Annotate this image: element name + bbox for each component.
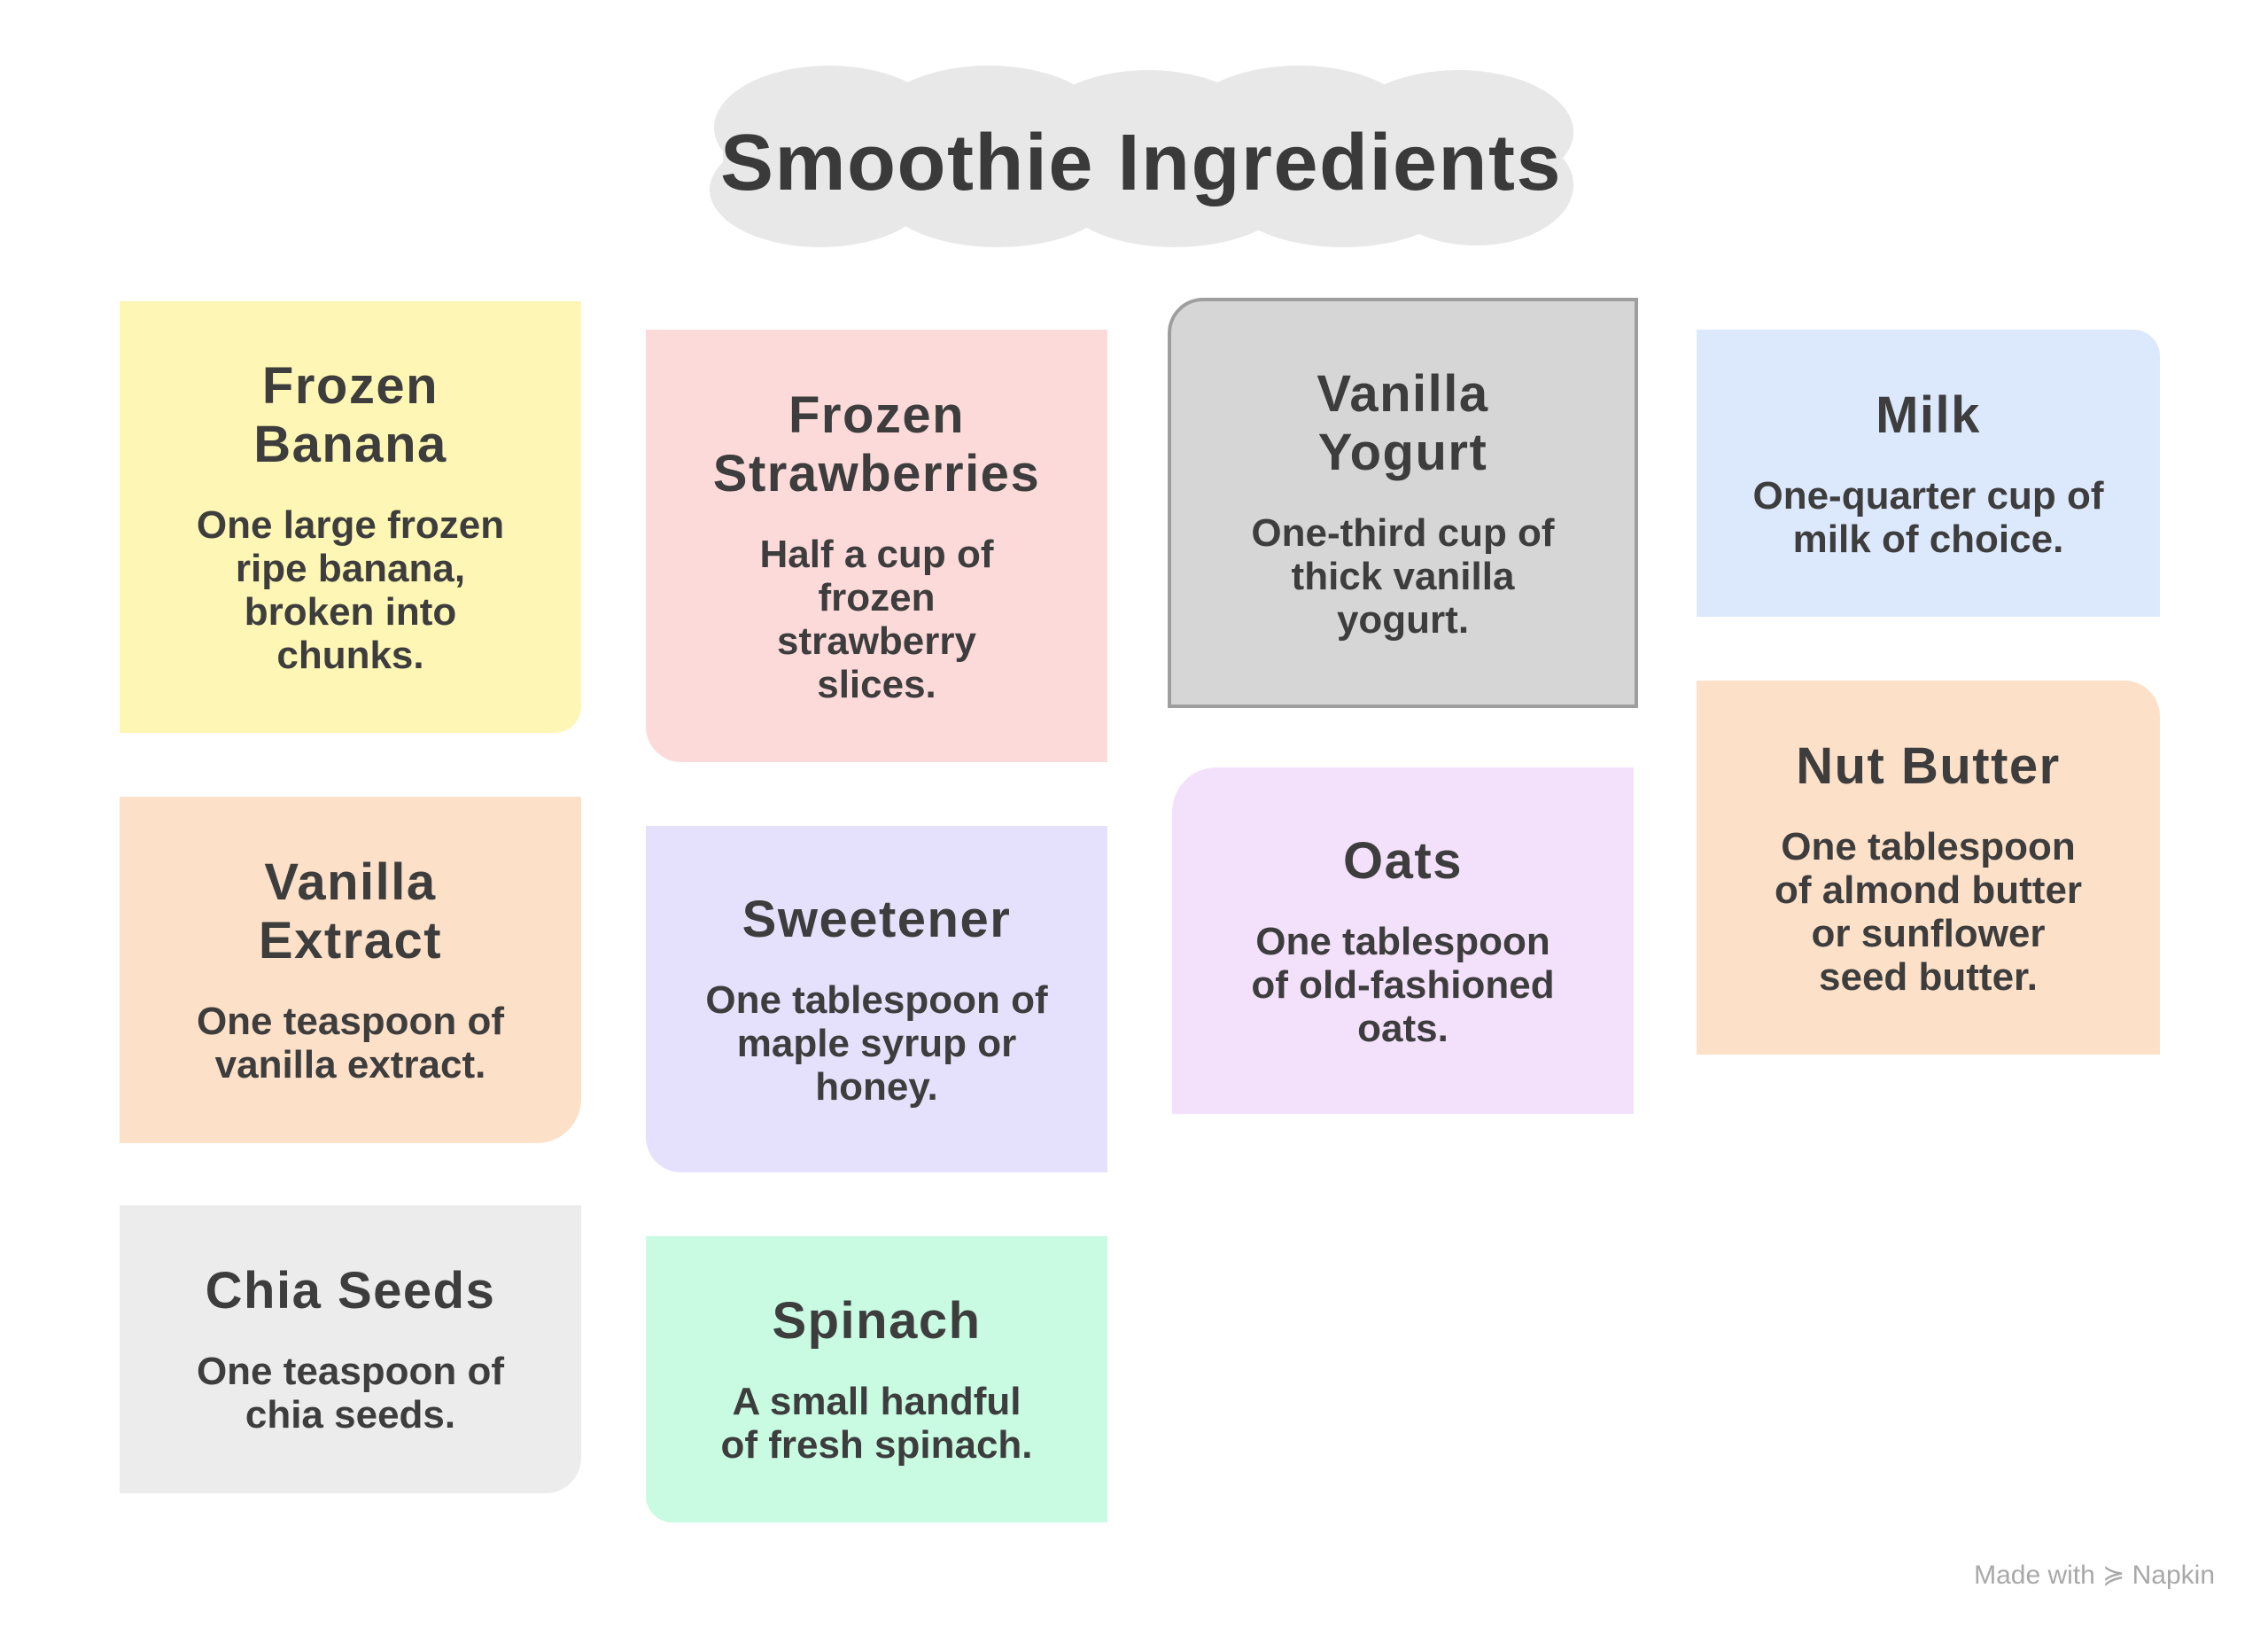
card: oats: of old-fashioned: [1251, 962, 1555, 1007]
card: vanilla yogurt: [1168, 298, 1638, 708]
card: spinach: of fresh spinach.: [720, 1423, 1033, 1467]
card: sweetener: maple syrup or: [737, 1021, 1016, 1065]
card: nut butter: of almond butter: [1775, 868, 2082, 911]
card: vanilla extract: Vanilla: [264, 853, 437, 911]
card: nut butter: seed butter.: [1819, 955, 2038, 998]
card: chia seeds: One teaspoon of: [197, 1350, 504, 1393]
card: vanilla yogurt: thick vanilla: [1292, 555, 1514, 597]
card: spinach: Spinach: [772, 1292, 982, 1350]
card: sweetener: Sweetener: [742, 890, 1011, 948]
card: vanilla extract: Extract: [259, 912, 442, 969]
title: Smoothie Ingredients: [720, 119, 1562, 207]
card: frozen banana: ripe banana,: [236, 547, 465, 590]
card: vanilla extract: [120, 797, 581, 1143]
card: sweetener: [646, 826, 1107, 1172]
card: vanilla yogurt: One-third cup of: [1251, 510, 1555, 555]
card: vanilla yogurt: Yogurt: [1318, 424, 1487, 480]
card: oats: [1172, 767, 1634, 1114]
card: nut butter: [1697, 681, 2160, 1055]
card: frozen strawberries: [646, 330, 1107, 762]
card: oats: oats.: [1357, 1007, 1449, 1049]
card: frozen strawberries: strawberry: [777, 619, 976, 663]
card: frozen strawberries: slices.: [817, 663, 936, 705]
card: nut butter: or sunflower: [1811, 911, 2046, 955]
title cloud: [710, 66, 1573, 247]
card: frozen strawberries: Half a cup of: [759, 532, 994, 576]
card: frozen banana: Banana: [253, 416, 447, 473]
card: frozen strawberries: Strawberries: [713, 445, 1040, 502]
card: frozen banana: One large frozen: [197, 503, 504, 547]
card: chia seeds: chia seeds.: [245, 1393, 455, 1436]
card: chia seeds: [120, 1205, 581, 1493]
card: nut butter: One tablespoon: [1781, 824, 2076, 868]
card: milk: milk of choice.: [1793, 518, 2063, 560]
card: sweetener: One tablespoon of: [705, 978, 1048, 1021]
card: milk: [1697, 330, 2160, 617]
card: frozen strawberries: frozen: [819, 576, 936, 619]
card: spinach: A small handful: [732, 1380, 1021, 1423]
card: frozen banana: broken into: [245, 590, 456, 634]
card: sweetener: honey.: [815, 1065, 938, 1108]
card: vanilla extract: One teaspoon of: [197, 1000, 504, 1043]
card: vanilla extract: vanilla extract.: [215, 1043, 485, 1086]
card: spinach: [646, 1236, 1107, 1522]
card: vanilla yogurt: yogurt.: [1337, 597, 1469, 642]
card: nut butter: Nut Butter: [1796, 737, 2061, 794]
card: frozen banana: [120, 301, 581, 733]
card: milk: One-quarter cup of: [1752, 473, 2104, 518]
card: frozen strawberries: Frozen: [788, 386, 965, 443]
watermark: Made with ≽ Napkin: [1974, 1561, 2215, 1590]
card: oats: Oats: [1343, 831, 1463, 890]
card: chia seeds: Chia Seeds: [206, 1262, 495, 1320]
card: frozen banana: Frozen: [262, 357, 439, 415]
card: frozen banana: chunks.: [276, 634, 424, 677]
card: oats: One tablespoon: [1255, 920, 1550, 962]
card: milk: Milk: [1876, 386, 1981, 443]
card: vanilla yogurt: Vanilla: [1317, 365, 1489, 422]
